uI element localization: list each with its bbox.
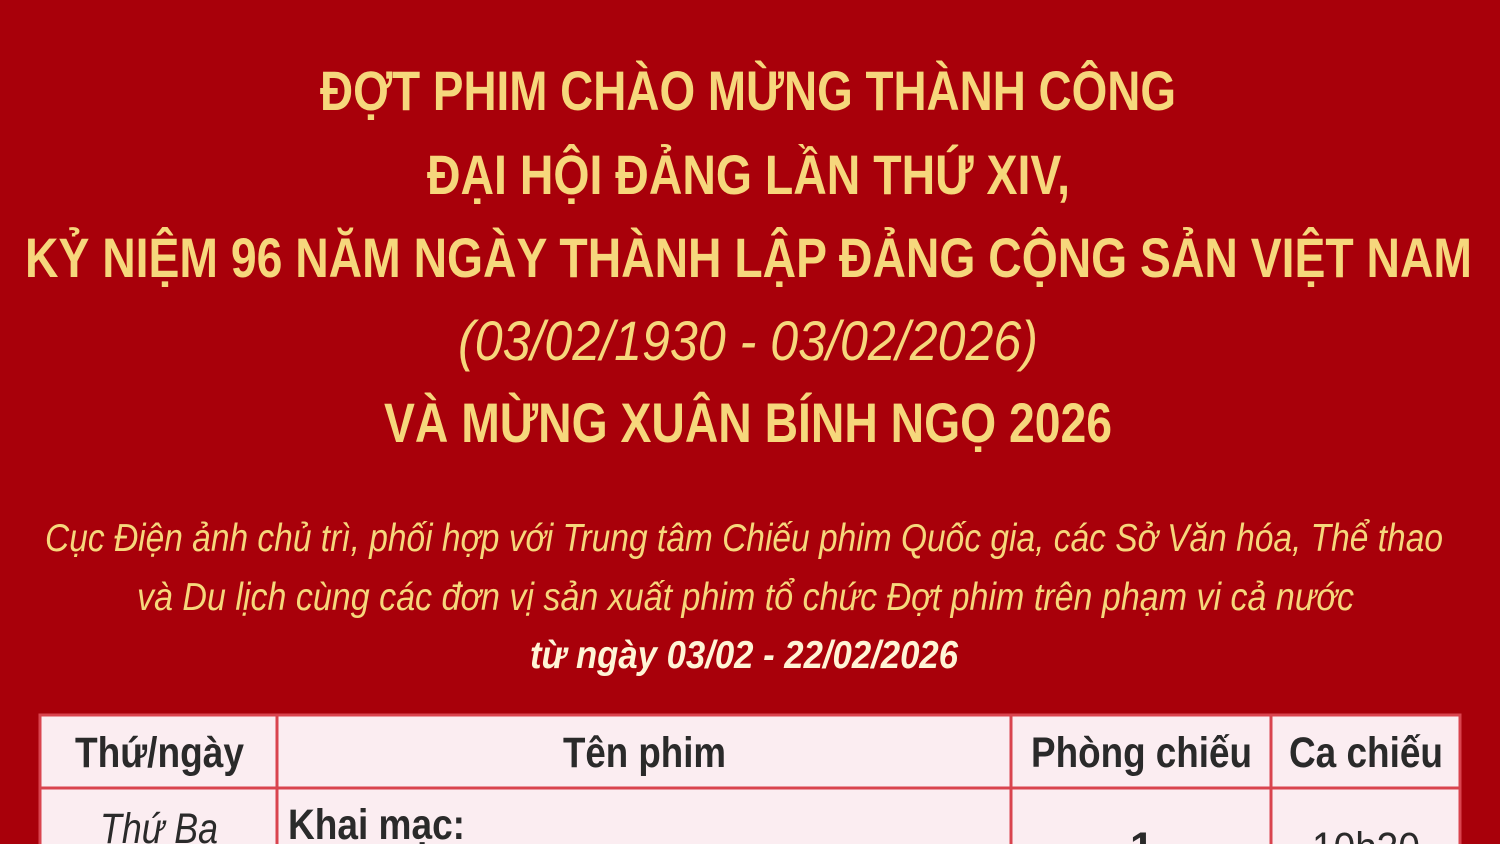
title: ĐỢT PHIM CHÀO MỪNG THÀNH CÔNG [320, 59, 1176, 122]
title: (03/02/1930 - 03/02/2026) [458, 309, 1038, 372]
table row [100, 801, 1420, 844]
table header: Thứ/ngày [75, 729, 244, 777]
table header: Phòng chiếu [1031, 729, 1252, 777]
title: VÀ MỪNG XUÂN BÍNH NGỌ 2026 [384, 391, 1112, 454]
subtitle text [45, 517, 1443, 677]
table header: Tên phim [563, 729, 726, 777]
title: ĐẠI HỘI ĐẢNG LẦN THỨ XIV, [427, 143, 1070, 206]
title [25, 59, 1472, 454]
table [40, 715, 1460, 844]
subtitle text: và Du lịch cùng các đơn vị sản xuất phim tổ chức Đợt phim trên phạm vi cả nước [137, 576, 1354, 619]
table header: Ca chiếu [1289, 729, 1443, 777]
table header [75, 729, 1443, 777]
subtitle text: từ ngày 03/02 - 22/02/2026 [530, 634, 958, 677]
